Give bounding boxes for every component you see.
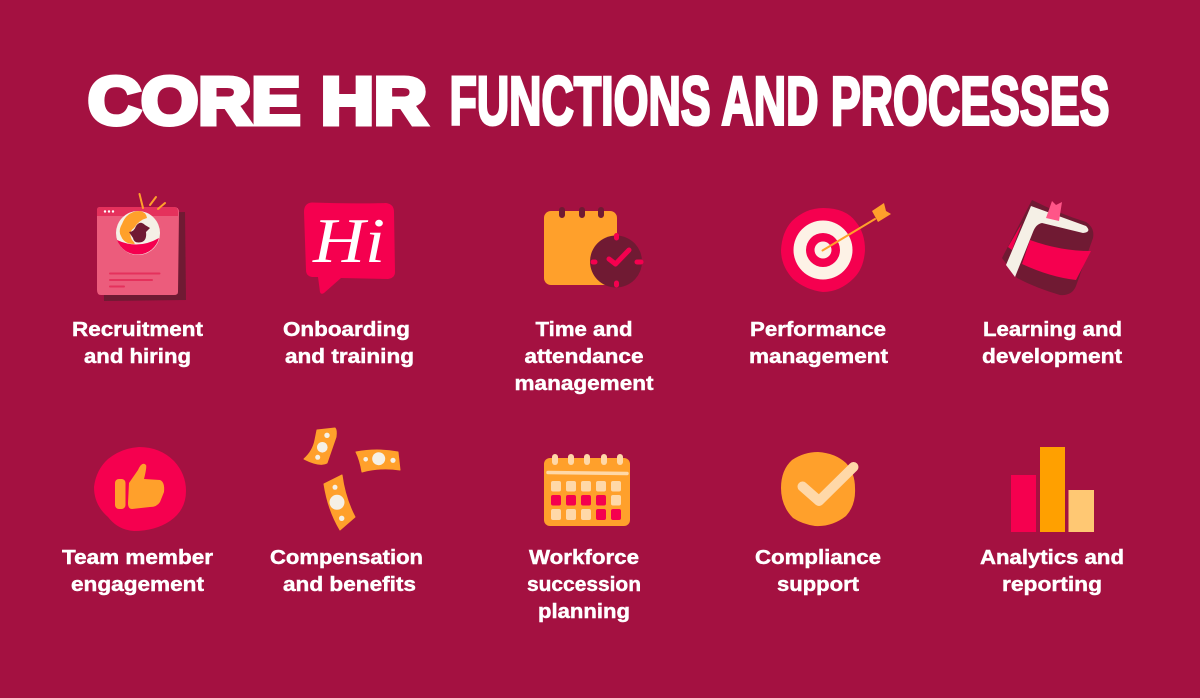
icon: candidate profile xyxy=(97,194,186,301)
icon: Hi speech bubble xyxy=(304,202,395,294)
label xyxy=(527,547,641,623)
item: onboarding and training xyxy=(283,202,414,368)
label xyxy=(980,547,1124,596)
label: succession xyxy=(527,574,641,596)
label: attendance xyxy=(524,346,644,368)
label: Compliance xyxy=(755,547,881,569)
label: Workforce xyxy=(529,547,639,569)
label: and benefits xyxy=(283,574,416,596)
label: Learning and xyxy=(983,319,1122,341)
label: Time and xyxy=(536,319,632,341)
item: analytics and reporting xyxy=(980,447,1124,596)
label xyxy=(283,319,414,368)
item: recruitment and hiring xyxy=(72,194,203,368)
label xyxy=(982,319,1122,368)
label: Team member xyxy=(62,547,213,569)
label xyxy=(514,319,654,395)
label: and training xyxy=(285,346,414,368)
icon: bar chart xyxy=(1011,447,1094,532)
label xyxy=(270,547,423,596)
item: learning and development xyxy=(982,200,1122,368)
title: CORE HR xyxy=(88,64,427,139)
label: engagement xyxy=(71,574,204,596)
label: Performance xyxy=(750,319,886,341)
label: and hiring xyxy=(84,346,191,368)
label xyxy=(72,319,203,368)
label: Analytics and xyxy=(980,547,1124,569)
label xyxy=(755,547,881,596)
icon: thumbs up xyxy=(94,447,186,531)
icon: book xyxy=(1002,200,1093,295)
label: reporting xyxy=(1002,574,1102,596)
label: Recruitment xyxy=(72,319,203,341)
icon: calendar grid xyxy=(544,454,630,526)
icon: target and arrow xyxy=(781,203,891,292)
label: support xyxy=(777,574,859,596)
label: development xyxy=(982,346,1122,368)
item: time and attendance management xyxy=(514,210,654,395)
label xyxy=(62,547,213,596)
label xyxy=(749,319,888,368)
icon: calendar and clock xyxy=(544,210,642,288)
icon: flying money xyxy=(304,428,400,530)
label: Compensation xyxy=(270,547,423,569)
item: team member engagement xyxy=(62,447,213,596)
label: Onboarding xyxy=(283,319,410,341)
item: workforce succession planning xyxy=(527,454,641,623)
label: planning xyxy=(538,601,630,623)
item: compliance support xyxy=(755,452,881,596)
label: management xyxy=(749,346,888,368)
label: management xyxy=(514,373,654,395)
icon: checkmark badge xyxy=(781,452,855,526)
icon: Hi speech bubble: Hi xyxy=(312,205,385,276)
item: performance management xyxy=(749,203,891,368)
title xyxy=(88,62,1110,140)
item: compensation and benefits xyxy=(270,428,423,596)
